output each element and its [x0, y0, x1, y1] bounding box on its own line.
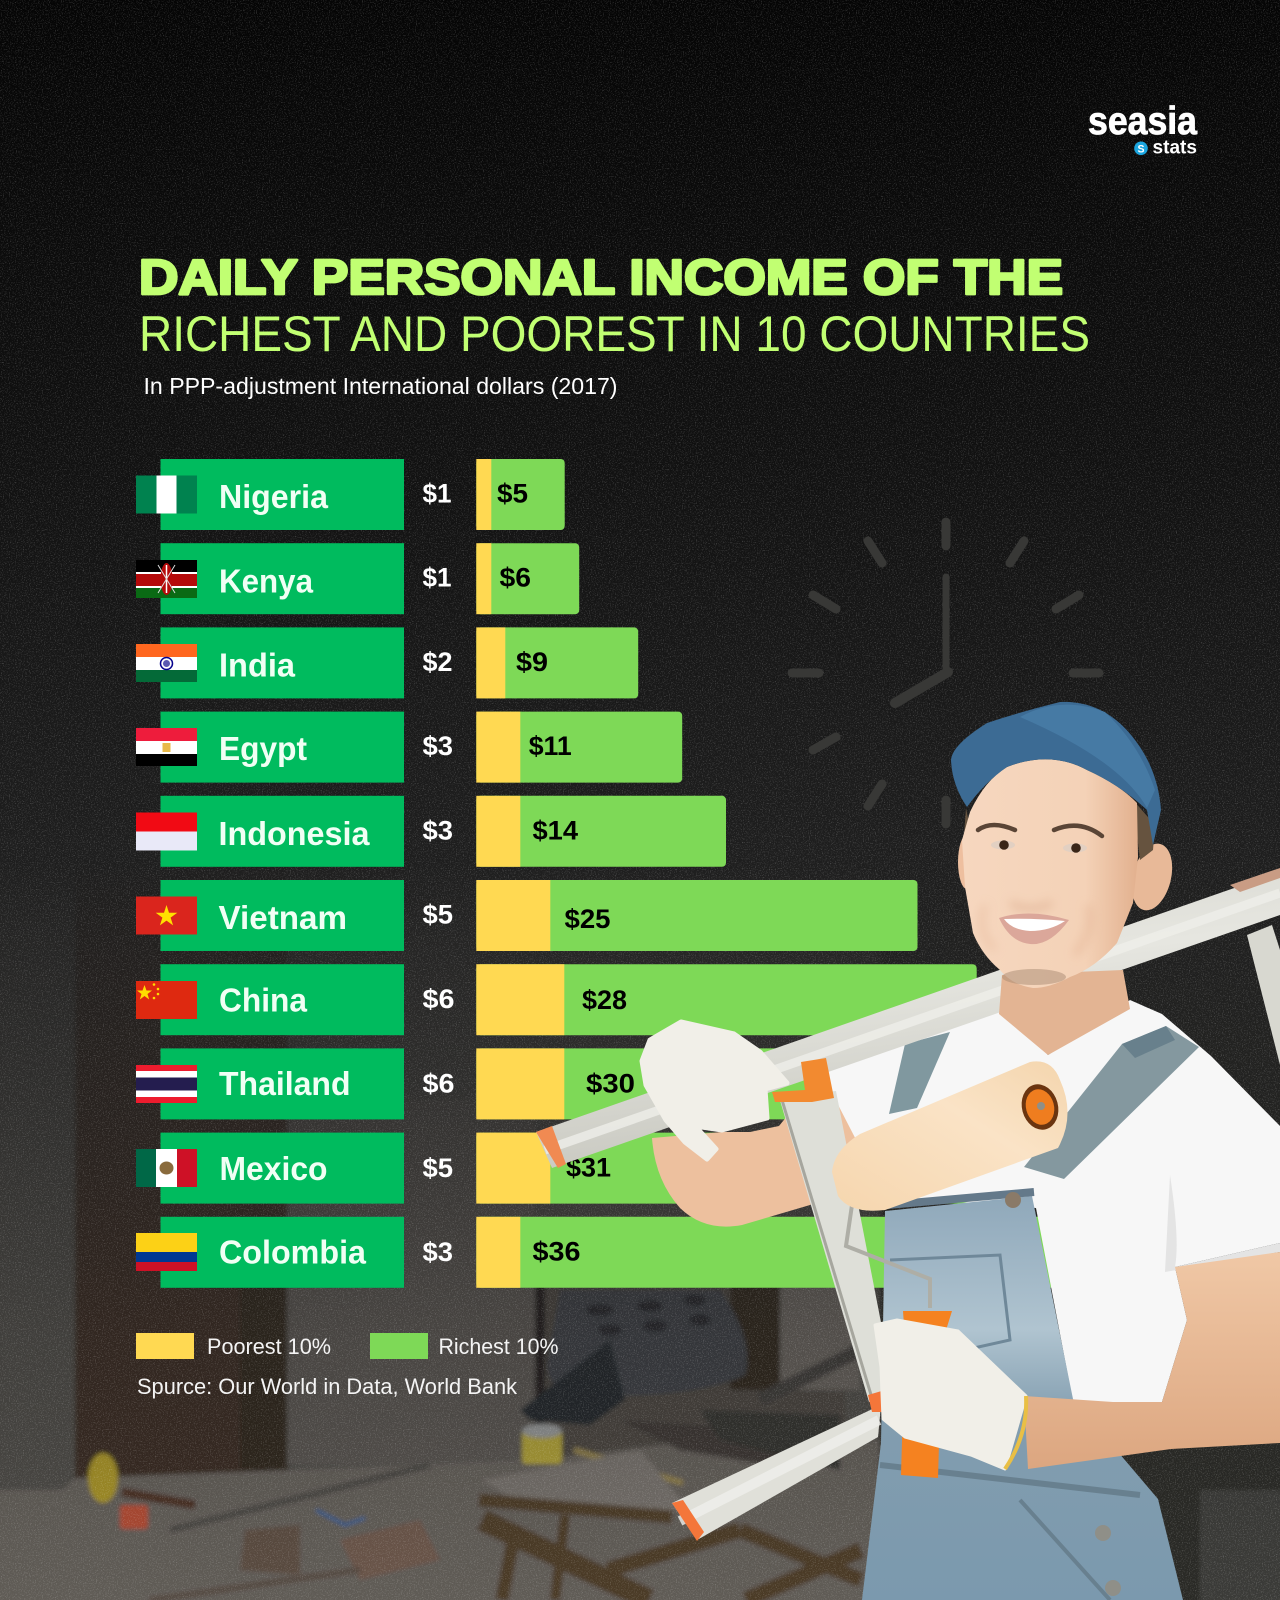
head: [951, 702, 1179, 1055]
flag: Egypt: [136, 728, 197, 766]
row: Thailand: $30: [586, 1069, 635, 1099]
ladder top rail: [536, 868, 1280, 1168]
flag: Mexico: [136, 1149, 197, 1187]
legend: [136, 1333, 558, 1359]
row: Kenya: $6: [500, 563, 531, 593]
row: Colombia: [136, 1217, 1112, 1288]
flag: Thailand: [136, 1065, 197, 1103]
row: Colombia: Colombia: [219, 1234, 367, 1270]
legend: Poorest 10%: [207, 1334, 331, 1359]
logo: seasia stats: seasia: [1088, 100, 1197, 143]
row: Nigeria: Nigeria: [219, 478, 329, 515]
row: Mexico: $5: [422, 1153, 453, 1183]
row: China: $6: [422, 984, 454, 1014]
flag: Kenya: [136, 560, 197, 598]
row: Nigeria: $1: [422, 478, 452, 508]
glove cuff edge: [1005, 1396, 1026, 1469]
row: Thailand: Thailand: [219, 1065, 350, 1102]
left ear: [958, 835, 976, 889]
title: [139, 251, 1090, 362]
row: Indonesia: [136, 796, 726, 867]
row: India: [136, 627, 638, 698]
cap: [951, 702, 1161, 845]
construction debris on floor: [88, 1340, 880, 1600]
row: Nigeria: $5: [497, 478, 528, 508]
row: Egypt: $3: [422, 731, 453, 761]
flag: Indonesia: [136, 812, 197, 850]
stubble: [1002, 969, 1066, 985]
face: [962, 759, 1138, 988]
row: China: China: [219, 982, 308, 1018]
row: Thailand: [136, 1048, 1006, 1119]
ladder front leg: [672, 1091, 885, 1541]
row: Vietnam: Vietnam: [218, 899, 347, 936]
eyes: [991, 840, 1087, 853]
hair: [964, 800, 1155, 860]
legend: Richest 10%: [438, 1334, 558, 1359]
mattress in background: [548, 1290, 747, 1396]
row: Egypt: [136, 712, 682, 783]
row: Egypt: $11: [529, 731, 572, 761]
nose and mouth-crease shading: [982, 903, 1090, 955]
flag: India: [136, 644, 197, 682]
row: Kenya: $1: [422, 563, 452, 593]
row: Vietnam: [136, 880, 918, 951]
row: Mexico: [136, 1133, 1025, 1204]
logo: seasia stats: S: [1138, 144, 1144, 156]
paint roller handle: [846, 1205, 952, 1478]
row: Vietnam: $5: [422, 900, 453, 930]
flag: Colombia: [136, 1233, 197, 1271]
row: China: $28: [582, 985, 627, 1015]
eyebrows: [978, 825, 1102, 836]
neck: [999, 970, 1130, 1055]
left glove: [642, 1022, 787, 1159]
row: Indonesia: $3: [422, 815, 453, 845]
right arm: [1024, 1252, 1280, 1469]
row: Mexico: $31: [566, 1153, 611, 1183]
row: Thailand: $6: [422, 1068, 454, 1098]
row: Nigeria: [136, 459, 565, 530]
row: India: $2: [422, 647, 452, 677]
row: Egypt: Egypt: [219, 730, 307, 767]
row: Indonesia: $14: [532, 815, 578, 845]
flag: China: [136, 981, 197, 1019]
roller end cap: [1017, 1080, 1063, 1134]
left arm: [652, 1100, 860, 1227]
flag: Vietnam: [136, 896, 197, 934]
title: DAILY PERSONAL INCOME OF THE: [139, 251, 1063, 305]
row: Colombia: $36: [532, 1237, 580, 1267]
paint roller sleeve: [832, 1061, 1068, 1211]
icon: wall clock in background: [792, 522, 1099, 824]
right glove: [875, 1320, 1026, 1469]
illustration: painter with ladder and roller: [536, 702, 1280, 1600]
subtitle: In PPP-adjustment International dollars (2017): [144, 373, 618, 399]
logo: seasia stats: stats: [1152, 138, 1197, 158]
row: Mexico: Mexico: [220, 1150, 328, 1187]
row: India: $9: [516, 647, 548, 677]
logo: seasia stats: [1088, 100, 1197, 158]
right ear: [1125, 839, 1179, 915]
overalls: [862, 1026, 1199, 1600]
row: China: [136, 964, 977, 1035]
flag: Nigeria: [136, 476, 197, 514]
ladder back leg: [1247, 925, 1280, 1065]
mouth: [999, 913, 1069, 944]
row: Colombia: $3: [422, 1237, 453, 1267]
source note: Spurce: Our World in Data, World Bank: [137, 1374, 518, 1399]
row: Indonesia: Indonesia: [218, 815, 370, 852]
title: RICHEST AND POOREST IN 10 COUNTRIES: [139, 306, 1090, 362]
row: Vietnam: $25: [564, 904, 610, 934]
row: India: India: [219, 646, 296, 684]
row: Kenya: [136, 543, 579, 614]
wooden trestle: [479, 1500, 861, 1600]
row: Kenya: Kenya: [219, 562, 314, 600]
t-shirt: [815, 1000, 1280, 1402]
ladder orange clip: [772, 1058, 834, 1102]
